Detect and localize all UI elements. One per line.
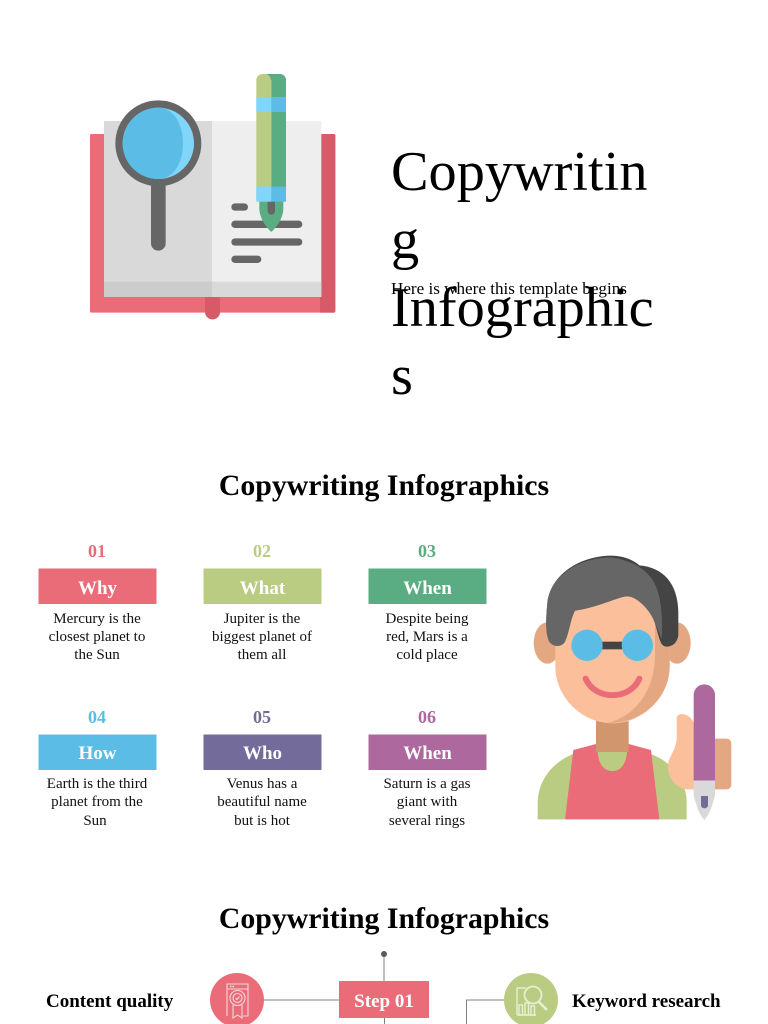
- panel: 03 when: red, Mars is a: [386, 629, 468, 645]
- panel: 02 what: them all: [238, 647, 286, 663]
- label: content quality: Content quality: [46, 991, 174, 1012]
- heading: section two: Copywriting Infographics: [219, 902, 549, 935]
- panel: 01 why: the Sun: [74, 647, 120, 663]
- panel: 03 when: [368, 541, 486, 663]
- step 01 box: [339, 981, 429, 1018]
- title: g: [391, 209, 419, 271]
- panel: 04 how: Earth is the third: [47, 776, 148, 792]
- panel: 04 how: 04: [88, 707, 106, 727]
- panel: 02 what: Jupiter is the: [224, 611, 301, 627]
- panel: 02 what: biggest planet of: [212, 629, 312, 645]
- panel: 04 how: How: [78, 743, 117, 764]
- panel: 02 what: [204, 541, 322, 663]
- panel: 01 why: Mercury is the: [53, 611, 141, 627]
- panel: 05 who: but is hot: [234, 813, 291, 829]
- title: Infographic: [391, 277, 654, 339]
- connector dot: [381, 951, 387, 957]
- panel: 05 who: beautiful name: [217, 794, 307, 810]
- label: keyword research: Keyword research: [572, 991, 721, 1012]
- panel: 03 when: cold place: [396, 647, 458, 663]
- panel: 04 how: [38, 707, 156, 829]
- panel: 02 what: 02: [253, 541, 271, 561]
- panel: 06 when: Saturn is a gas: [383, 776, 471, 792]
- panel: 01 why: Why: [78, 578, 118, 599]
- title: [391, 141, 654, 407]
- connector lines: [264, 954, 504, 1024]
- panel: 06 when: [368, 707, 486, 829]
- title: s: [391, 345, 413, 407]
- icon: content quality badge: [210, 973, 264, 1024]
- panel: 05 who: 05: [253, 707, 271, 727]
- panel: 01 why: 01: [88, 541, 106, 561]
- panel: 06 when: giant with: [397, 794, 458, 810]
- panel: 02 what: What: [240, 578, 286, 599]
- panel: 05 who: Who: [243, 743, 282, 764]
- panel: 03 when: When: [403, 578, 452, 599]
- panel: 03 when: Despite being: [386, 611, 469, 627]
- subtitle: Here is where this template begins: [391, 279, 627, 298]
- panel: 04 how: planet from the: [51, 794, 143, 810]
- panel: 04 how: Sun: [83, 813, 107, 829]
- panel: 01 why: closest planet to: [49, 629, 145, 645]
- panel: 06 when: several rings: [389, 813, 465, 829]
- title: Copywritin: [391, 141, 647, 203]
- panel: 06 when: When: [403, 743, 452, 764]
- panel: 03 when: 03: [418, 541, 436, 561]
- icon: keyword research chart and magnifier: [504, 973, 558, 1024]
- heading: section one: Copywriting Infographics: [219, 469, 549, 502]
- panel: 06 when: 06: [418, 707, 436, 727]
- panel: 01 why: [38, 541, 156, 663]
- icon: open book with magnifier and pen: [90, 74, 335, 319]
- panel: 05 who: [204, 707, 322, 829]
- step 01 box: Step 01: [354, 991, 414, 1012]
- panel: 05 who: Venus has a: [227, 776, 298, 792]
- icon: smiling writer with glasses and pen: [534, 556, 731, 820]
